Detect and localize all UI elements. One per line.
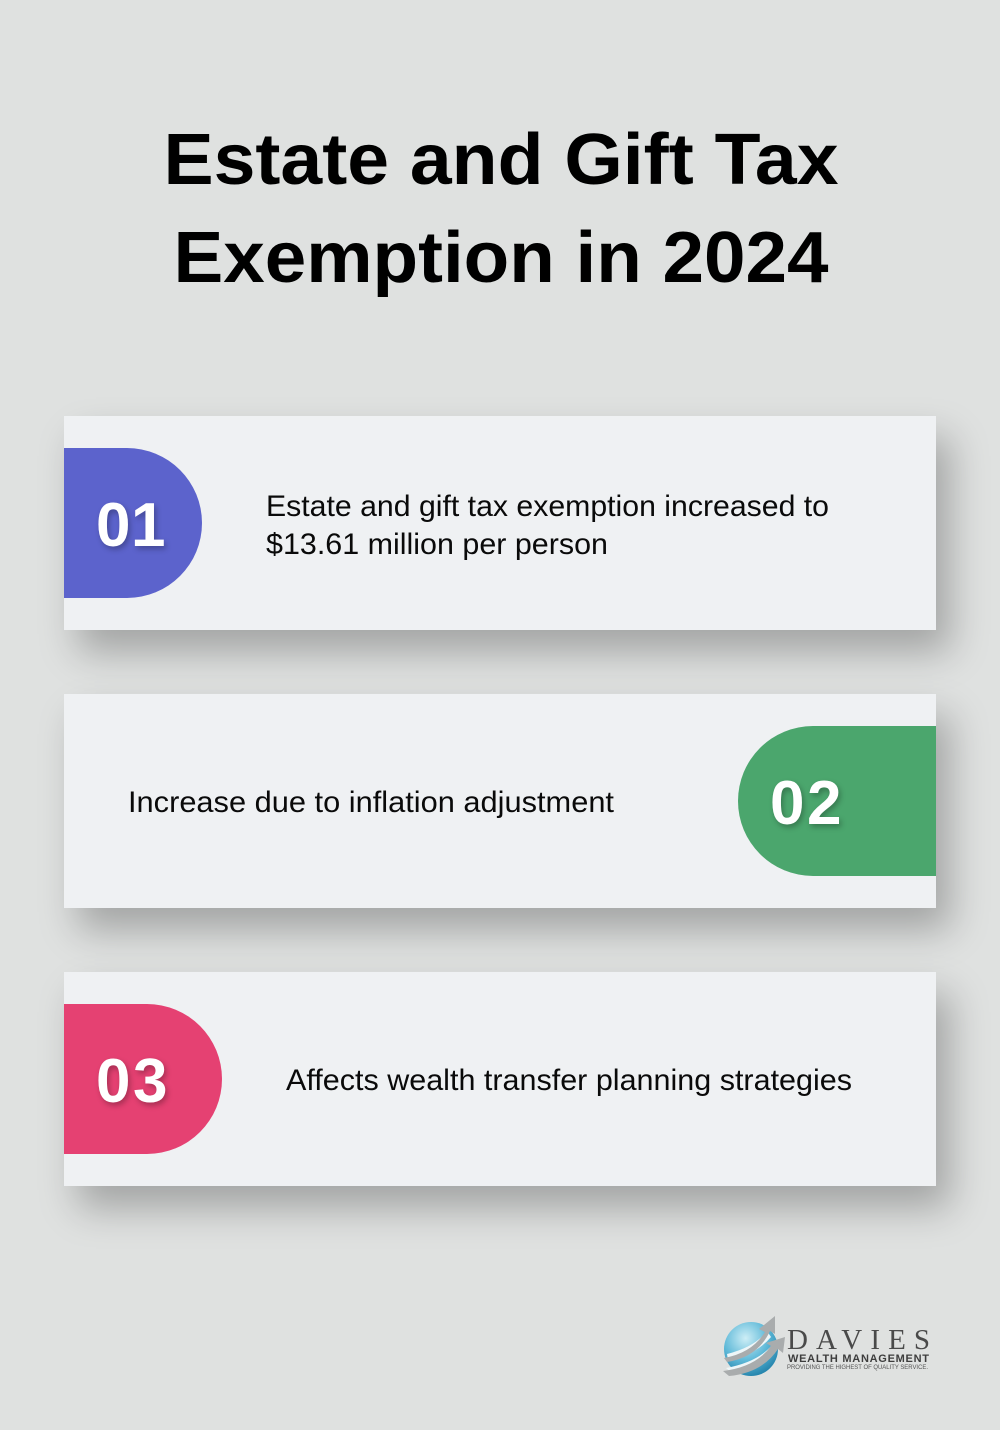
badge: 01	[64, 448, 202, 598]
text: step 01: $13.61 million per person	[266, 528, 608, 561]
logo wordmark	[787, 1324, 930, 1371]
badge: 03: 03	[96, 1047, 170, 1116]
panel: step 02	[64, 694, 936, 908]
icon: globe with arrows	[723, 1316, 785, 1376]
text: step 02: Increase due to inflation adjustment	[128, 786, 615, 819]
badge: 02: 02	[770, 769, 844, 838]
logo wordmark: PROVIDING THE HIGHEST OF QUALITY SERVICE.	[787, 1364, 928, 1371]
badge: 01: 01	[96, 491, 166, 560]
title: Estate and Gift Tax	[164, 120, 838, 200]
text: step 01	[266, 490, 829, 561]
badge: 03	[64, 1004, 222, 1154]
badge: 02	[738, 726, 936, 876]
logo: Davies Wealth Management	[723, 1316, 930, 1376]
title	[164, 120, 838, 298]
logo wordmark: DAVIES	[787, 1324, 930, 1356]
text: step 01: Estate and gift tax exemption increased to	[266, 490, 829, 523]
panel: step 01	[64, 416, 936, 630]
text: step 03: Affects wealth transfer planning strategies	[286, 1064, 852, 1097]
title: Exemption in 2024	[174, 218, 829, 298]
logo wordmark: WEALTH MANAGEMENT	[788, 1353, 929, 1365]
panel: step 03	[64, 972, 936, 1186]
